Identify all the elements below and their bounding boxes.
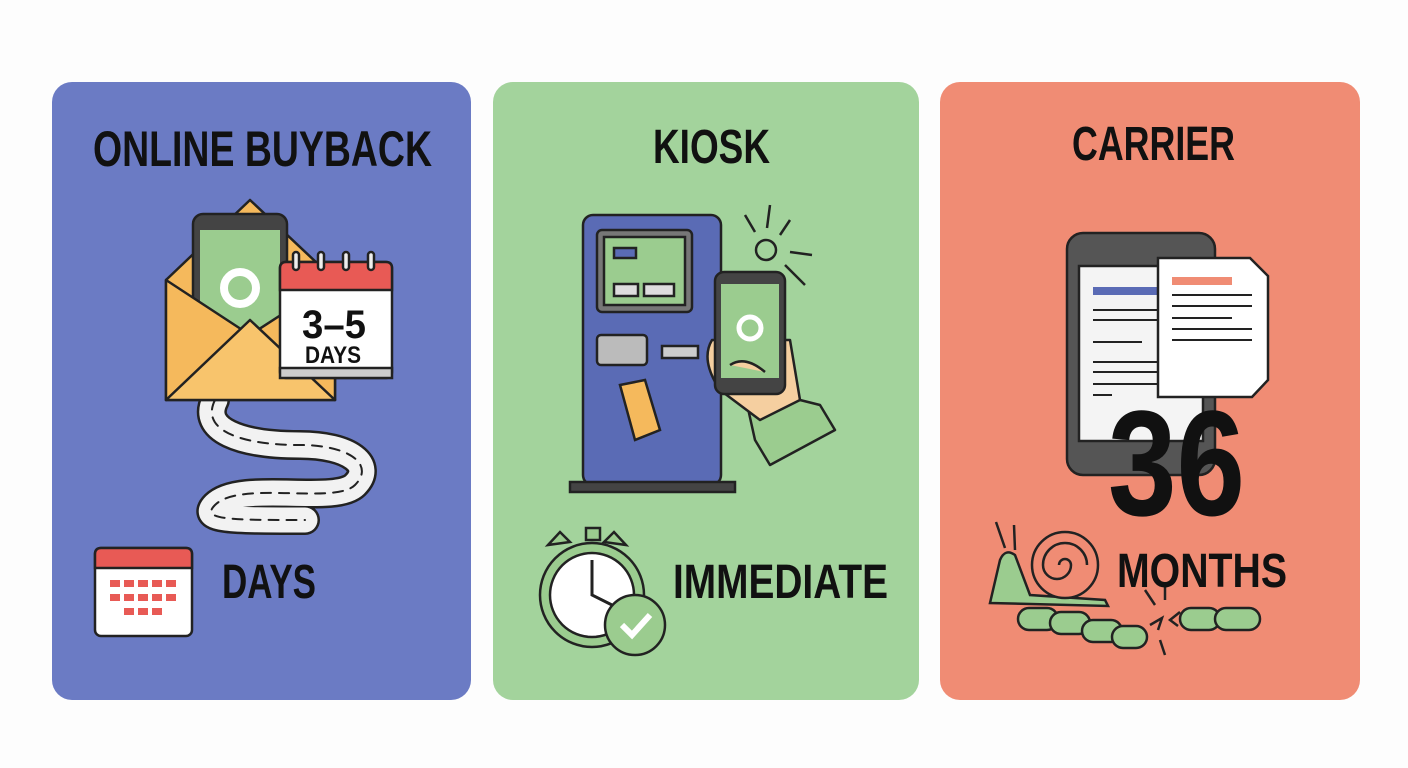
icon: snail [990,522,1108,606]
label: days: DAYS [222,556,316,609]
panel: online buyback: 3–5 [302,303,366,347]
icon: phone with contract [1067,233,1268,475]
label: immediate: IMMEDIATE [673,556,888,609]
big number 36: 36 [1108,379,1245,547]
title: online buyback: ONLINE BUYBACK [93,121,432,177]
title: kiosk: KIOSK [653,121,770,174]
icon: calendar 3-5 days [280,252,392,378]
icon: envelope with phone [166,200,335,400]
icon: broken chain [1018,582,1260,655]
icon: kiosk machine [570,215,735,492]
icon: hand with phone [708,272,835,465]
icon: sparkle [745,205,812,285]
title: carrier: CARRIER [1072,118,1235,171]
panel: online buyback: DAYS [305,342,361,369]
panel: kiosk [493,82,919,700]
panel: online buyback [52,82,471,700]
panel: carrier [940,82,1360,700]
icon: stopwatch [540,528,665,655]
label: months: MONTHS [1117,545,1287,598]
icon: road [211,400,362,520]
icon: small calendar [95,548,192,636]
